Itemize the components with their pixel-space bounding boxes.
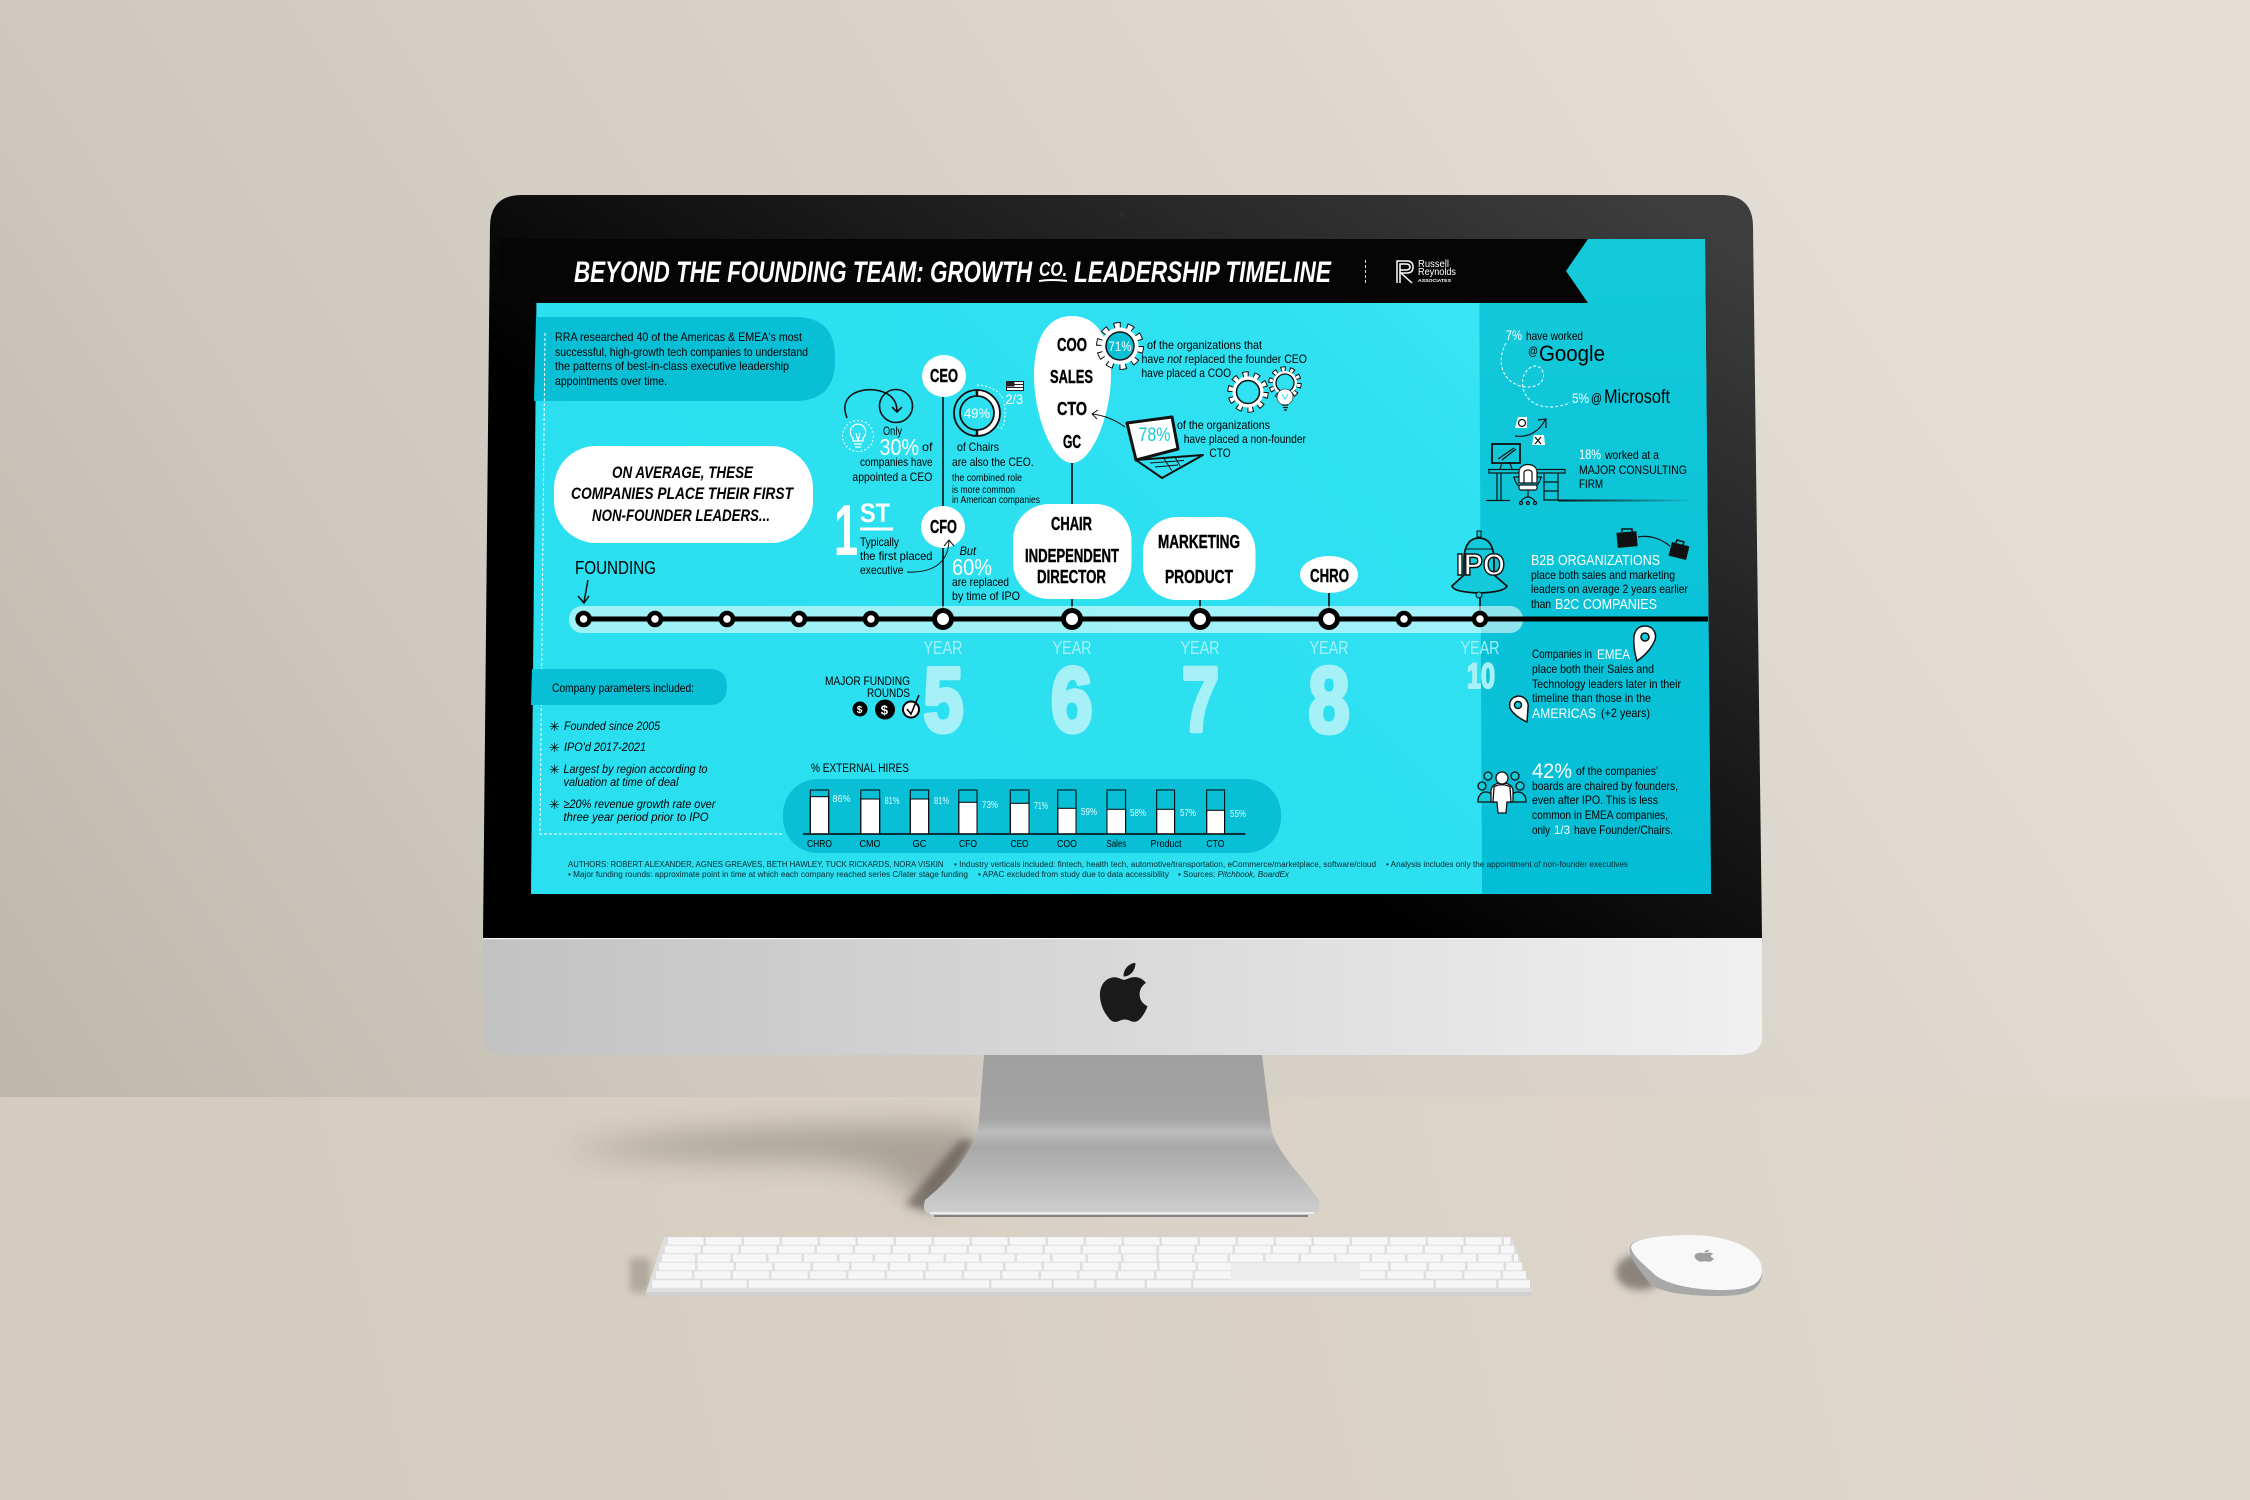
stat: B2B organizations: leaders on average 2 years earlier [1531, 582, 1688, 596]
role bubble: Chair, Independent Director [1013, 504, 1132, 599]
title banner [500, 239, 1588, 303]
logo: Russell Reynolds Associates: Russell [1418, 259, 1449, 270]
stat: 18% consulting: FIRM [1579, 477, 1603, 491]
title: BEYOND THE FOUNDING TEAM: GROWTH [574, 256, 1033, 289]
title: LEADERSHIP TIMELINE [1074, 256, 1332, 289]
logo: Russell Reynolds Associates [1397, 259, 1456, 283]
bar categories [807, 839, 1225, 850]
bar values: 57% [1180, 808, 1196, 819]
role bubble: COO, Sales, CTO, GC: CTO [1057, 399, 1087, 419]
icon: gears with bulb [1230, 369, 1299, 410]
stat: 78% placed a CTO: have placed a non-founder [1184, 432, 1306, 446]
year labels and numbers: YEAR [1460, 638, 1500, 658]
major funding rounds: ROUNDS [867, 686, 910, 700]
stat: EMEA vs Americas: Companies in [1532, 647, 1592, 661]
webcam [1119, 212, 1125, 218]
timeline [569, 606, 1708, 633]
icon: briefcases [1616, 529, 1689, 560]
monitor stand [924, 1055, 1320, 1216]
logo: Russell Reynolds Associates: ASSOCIATES [1418, 278, 1451, 283]
stat: chairs also CEO: in American companies [952, 494, 1040, 506]
icon: loop arrow and bulb [842, 390, 912, 452]
stat: 1st placed executive: the first placed [860, 549, 932, 563]
screen background [531, 239, 1711, 894]
bar categories: CTO [1206, 839, 1225, 850]
icon: IPO bell: IPO [1456, 547, 1505, 582]
bar categories: CEO [1010, 839, 1029, 850]
callout: on average [554, 446, 813, 543]
role bubble: CHRO [1300, 556, 1358, 593]
panel: company parameters: Largest by region according to [564, 762, 708, 776]
footer notes: • Analysis includes only the appointment of non-founder executives [1386, 860, 1628, 869]
panel: intro text [534, 317, 835, 834]
footer notes: • Sources: Pitchbook, BoardEx [1178, 870, 1290, 879]
stat: B2B organizations: place both sales and marketing [1531, 568, 1675, 582]
stat: two thirds: 2/3 [1006, 391, 1023, 407]
stat: 42% founder chairs: common in EMEA companies, [1532, 808, 1668, 822]
stat: 18% consulting: worked at a [1604, 448, 1659, 462]
year labels and numbers: 8 [1308, 648, 1350, 752]
role bubble: COO, Sales, CTO, GC: GC [1063, 432, 1081, 452]
role bubble: Marketing, Product: PRODUCT [1165, 567, 1233, 587]
icon: apple logo [1100, 963, 1147, 1022]
year labels and numbers: 6 [1051, 650, 1092, 751]
major funding rounds [825, 674, 919, 720]
rule under the desk [1558, 500, 1695, 502]
role bubble: Marketing, Product: MARKETING [1158, 532, 1240, 552]
mouse [1630, 1235, 1762, 1296]
year labels and numbers: 10 [1467, 657, 1495, 696]
role bubble: CEO [922, 355, 966, 397]
icon: board members [1478, 772, 1526, 813]
role bubble: CHRO: CHRO [1310, 566, 1349, 586]
stat: 42% founder chairs: even after IPO. This is less [1532, 793, 1658, 807]
stat: Google and Microsoft alumni: 5% [1572, 390, 1589, 406]
footer notes: • APAC excluded from study due to data accessibility [978, 870, 1169, 879]
bar categories: CHRO [807, 839, 832, 850]
stat: 18% consulting: 18% [1579, 446, 1601, 462]
role bubble: COO, Sales, CTO, GC [1034, 316, 1111, 463]
stat: 71% placed a COO [1142, 338, 1307, 380]
bar categories: GC [912, 839, 926, 850]
stat: chairs also CEO: are also the CEO. [952, 455, 1034, 469]
major funding rounds: $ [857, 705, 863, 716]
bar values: 81% [934, 796, 949, 807]
chart: % external hires: % EXTERNAL HIRES [811, 761, 909, 775]
year labels and numbers: YEAR [1180, 638, 1220, 658]
background: desk surface [0, 1097, 2250, 1500]
icon: tic-tac-toe strategy arrow [1515, 417, 1546, 445]
role bubble: COO, Sales, CTO, GC: COO [1057, 335, 1087, 355]
stat: EMEA vs Americas: AMERICAS [1532, 705, 1596, 721]
icon: gear 71% [1100, 326, 1140, 366]
bar values: 55% [1230, 809, 1246, 820]
stat: 42% founder chairs: boards are chaired by founders, [1532, 779, 1678, 793]
stat: 30% appointed a CEO: Only [883, 424, 902, 438]
stat: 78% placed a CTO [1177, 418, 1306, 460]
bar categories: CMO [860, 839, 881, 850]
stat: Google and Microsoft alumni: Google [1539, 341, 1605, 366]
bar values: 81% [884, 796, 900, 807]
title: CO. [1039, 259, 1067, 281]
panel: company parameters: Founded since 2005 [564, 719, 660, 733]
role bubble: Chair, Independent Director: CHAIR [1051, 514, 1092, 534]
stat: EMEA vs Americas: (+2 years) [1601, 706, 1650, 720]
panel: company parameters: ✳ [549, 763, 560, 778]
footer notes [568, 860, 1628, 879]
stat: 71% placed a COO: of the organizations that [1147, 338, 1263, 352]
callout: on average: NON-FOUNDER LEADERS... [592, 506, 770, 525]
stat: B2B organizations: B2C COMPANIES [1555, 596, 1657, 613]
year labels and numbers: YEAR [1052, 638, 1092, 658]
panel: intro text: RRA researched 40 of the Americas & EMEA's most [555, 330, 803, 344]
monitor chin with logo [483, 938, 1762, 1055]
shadow of keyboard [630, 1258, 650, 1292]
chart: % external hires [783, 761, 1281, 853]
stat: 60% replaced: 60% [952, 554, 992, 580]
stat: EMEA vs Americas [1532, 646, 1681, 721]
major funding rounds: MAJOR FUNDING [825, 674, 910, 688]
year labels and numbers: 5 [924, 650, 964, 751]
stat: 18% consulting [1579, 446, 1687, 491]
stat: 71% placed a COO: have placed a COO [1142, 366, 1231, 380]
footer notes: • Major funding rounds: approximate point in time at which each company reached series C/later stage funding [568, 870, 968, 879]
bar values: 59% [1081, 807, 1097, 818]
panel: company parameters [531, 669, 727, 824]
stat: 60% replaced: by time of IPO [952, 589, 1020, 603]
icon: gear 71%: 71% [1108, 338, 1132, 354]
role bubble: Chair, Independent Director: INDEPENDENT [1025, 546, 1119, 566]
role bubble: CEO: CEO [930, 366, 958, 386]
panel: company parameters: three year period prior to IPO [564, 810, 708, 824]
bar outlines [810, 790, 1225, 834]
stat: Google and Microsoft alumni: 7% [1506, 327, 1522, 343]
panel: company parameters: IPO'd 2017-2021 [564, 740, 646, 754]
stat: 18% consulting: MAJOR CONSULTING [1579, 463, 1687, 477]
year labels and numbers: YEAR [924, 638, 962, 658]
monitor bezel [483, 195, 1762, 938]
panel: intro text: appointments over time. [555, 374, 667, 388]
stat: B2B organizations: than [1531, 597, 1551, 611]
bar values: 73% [982, 800, 998, 811]
role bubble: Marketing, Product [1143, 517, 1256, 600]
stat: Google and Microsoft alumni [1501, 327, 1671, 408]
icon: laptop 78%: 78% [1138, 425, 1171, 446]
bar categories: COO [1057, 839, 1077, 850]
stat: 42% founder chairs [1532, 760, 1678, 837]
stat: 42% founder chairs: only [1532, 823, 1550, 837]
year labels and numbers: 7 [1182, 650, 1219, 751]
stat: 30% appointed a CEO [852, 424, 933, 484]
panel: company parameters: valuation at time of deal [564, 775, 679, 789]
role bubble: Chair, Independent Director: DIRECTOR [1037, 567, 1106, 587]
stat: EMEA vs Americas: EMEA [1597, 646, 1631, 662]
stat: Google and Microsoft alumni: @ [1528, 344, 1538, 358]
stat: 1st placed executive: 1 [834, 491, 858, 571]
icon: desk and chair [1486, 444, 1565, 504]
stat: chairs also CEO: of Chairs [957, 440, 999, 454]
icon: mouse logo [1695, 1250, 1714, 1262]
stat: B2B organizations [1531, 552, 1688, 613]
role connectors [943, 397, 1480, 619]
panel: right column background [1479, 239, 1711, 894]
panel: intro text: the patterns of best-in-class executive leadership [555, 359, 789, 373]
footer notes: • Industry verticals included: fintech, health tech, automotive/transportation, eCommerce/marketplace, software/cloud [954, 860, 1376, 869]
founding label with arrow: FOUNDING [575, 558, 656, 578]
callout: on average: COMPANIES PLACE THEIR FIRST [571, 484, 794, 503]
shadow of mouse [1616, 1254, 1664, 1290]
stand contact shadow [905, 1140, 975, 1212]
bar values [832, 794, 1246, 820]
stat: EMEA vs Americas: place both their Sales and [1532, 662, 1654, 676]
arrow: executive to CFO [907, 540, 954, 572]
role bubble: COO, Sales, CTO, GC: SALES [1050, 367, 1093, 387]
stat: 30% appointed a CEO: of [922, 440, 933, 454]
stat: Google and Microsoft alumni: @ [1591, 390, 1602, 406]
stat: EMEA vs Americas: Technology leaders later in their [1532, 677, 1681, 691]
arrow: laptop to CTO [1092, 410, 1125, 427]
stat: 78% placed a CTO: of the organizations [1177, 418, 1270, 432]
stat: 1st placed executive [834, 491, 932, 577]
founding label with arrow [575, 558, 656, 603]
stat: 42% founder chairs: of the companies' [1576, 764, 1658, 778]
stat: 30% appointed a CEO: appointed a CEO [852, 470, 932, 484]
keyboard [646, 1237, 1532, 1296]
panel: company parameters: Company parameters included: [552, 681, 694, 695]
footer notes: AUTHORS: ROBERT ALEXANDER, AGNES GREAVES, BETH HAWLEY, TUCK RICKARDS, NORA VISKIN [568, 860, 944, 869]
bar categories: Product [1150, 839, 1182, 850]
bar values: 86% [832, 794, 851, 805]
callout: on average: ON AVERAGE, THESE [612, 463, 754, 482]
bar categories: Sales [1106, 839, 1126, 850]
stat: 30% appointed a CEO: 30% [880, 434, 919, 460]
icon: IPO bell [1452, 531, 1507, 598]
stat: 42% founder chairs: 1/3 [1554, 823, 1570, 837]
stat: Google and Microsoft alumni: have worked [1526, 329, 1583, 343]
stat: 42% founder chairs: 42% [1532, 760, 1572, 783]
icon: map pin Americas [1510, 696, 1528, 722]
stat: 1st placed executive: ST [860, 498, 890, 528]
chart: 49% ring [954, 385, 1005, 436]
panel: company parameters: ≥20% revenue growth rate over [564, 797, 716, 811]
stat: 1st placed executive: Typically [860, 535, 899, 549]
stat: 42% founder chairs: have Founder/Chairs. [1574, 823, 1673, 837]
shadow of the stand on the desk [560, 1125, 978, 1208]
role bubble: CFO [921, 506, 965, 548]
stat: 1st placed executive: executive [860, 563, 904, 577]
stat: chairs also CEO: is more common [952, 484, 1015, 496]
stat: B2B organizations: B2B ORGANIZATIONS [1531, 552, 1660, 569]
year labels and numbers [924, 638, 1500, 752]
stat: 60% replaced: are replaced [952, 575, 1009, 589]
icon: US flag [1006, 382, 1024, 390]
panel: intro text: successful, high-growth tech companies to understand [555, 345, 808, 359]
stat: 30% appointed a CEO: companies have [860, 455, 933, 469]
bar values: 58% [1130, 808, 1146, 819]
panel: company parameters: ✳ [549, 720, 560, 735]
bars [810, 797, 1225, 834]
stat: 71% placed a COO: have not replaced the founder CEO [1142, 352, 1307, 366]
bar categories: CFO [959, 839, 977, 850]
stat: chairs also CEO [952, 440, 1040, 506]
bar values: 71% [1034, 801, 1048, 812]
year labels and numbers: YEAR [1310, 638, 1348, 658]
background: wall [0, 0, 2250, 1097]
stat: chairs also CEO: the combined role [952, 472, 1022, 484]
panel: company parameters: ✳ [549, 798, 560, 813]
stat: Google and Microsoft alumni: Microsoft [1604, 387, 1671, 408]
panel: company parameters: ✳ [549, 741, 560, 756]
major funding rounds: $ [881, 702, 889, 718]
stat: 60% replaced: But [960, 544, 977, 558]
logo: Russell Reynolds Associates: Reynolds [1418, 267, 1456, 278]
stat: 60% replaced [952, 544, 1020, 603]
icon: map pin EMEA [1634, 626, 1656, 661]
timeline nodes [578, 610, 1486, 628]
stat: EMEA vs Americas: timeline than those in the [1532, 691, 1651, 705]
icon: laptop 78% [1127, 417, 1203, 478]
chart: 49% ring: 49% [964, 405, 990, 421]
stat: 78% placed a CTO: CTO [1209, 446, 1231, 460]
role bubble: CFO: CFO [930, 517, 957, 537]
